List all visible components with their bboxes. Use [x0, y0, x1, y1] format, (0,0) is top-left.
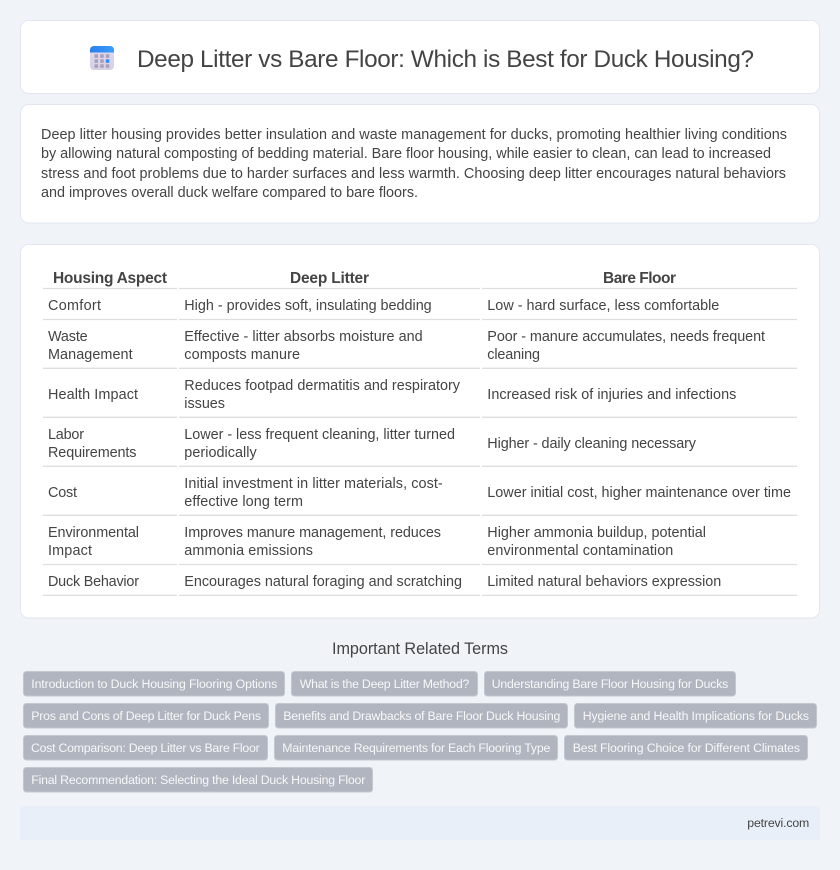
tag: Maintenance Requirements for Each Flooring Type — [282, 741, 550, 755]
tag — [24, 768, 372, 792]
row: health impact: Increased risk of injuries and infections — [487, 387, 736, 403]
row: comfort: Low - hard surface, less comfortable — [487, 298, 719, 314]
row: labor requirements: Higher - daily cleaning necessary — [487, 436, 697, 452]
row: environmental impact: Higher ammonia buildup, potential — [487, 525, 706, 541]
panel: introduction text: and improves overall duck welfare compared to bare floors. — [41, 185, 418, 201]
row: environmental impact: Improves manure management, reduces — [184, 525, 441, 541]
tag — [564, 736, 808, 760]
tag — [24, 672, 284, 696]
related term tags — [24, 672, 816, 792]
tag: Hygiene and Health Implications for Ducks — [583, 709, 809, 723]
row: comfort — [48, 298, 719, 314]
heading: important related terms: Important Related Terms — [332, 640, 508, 658]
table header row: Housing Aspect — [53, 270, 167, 287]
table header row: Deep Litter — [290, 270, 369, 287]
panel: introduction text: Deep litter housing provides better insulation and waste management for ducks, promoting healthier living conditions — [41, 127, 787, 143]
row: environmental impact: environmental contamination — [487, 543, 673, 559]
row: environmental impact: Impact — [48, 543, 92, 559]
tag — [24, 736, 268, 760]
tag: Benefits and Drawbacks of Bare Floor Duck Housing — [283, 709, 560, 723]
row: labor requirements — [48, 427, 697, 461]
tag — [484, 672, 736, 696]
tag — [274, 736, 558, 760]
title: Deep Litter vs Bare Floor: Which is Best for Duck Housing? — [137, 46, 754, 73]
tag: Understanding Bare Floor Housing for Ducks — [492, 677, 728, 691]
footer — [20, 806, 820, 840]
panel: introduction text: by allowing natural composting of bedding material. Bare floor housing, while easier to clean, can lead to increased — [41, 146, 771, 162]
row: health impact — [48, 378, 736, 412]
tag: Cost Comparison: Deep Litter vs Bare Floor — [31, 741, 260, 755]
row: environmental impact: Environmental — [48, 525, 139, 541]
tag: Pros and Cons of Deep Litter for Duck Pens — [31, 709, 261, 723]
row: health impact: issues — [184, 396, 225, 412]
tag: What is the Deep Litter Method? — [300, 677, 469, 691]
row: health impact: Health Impact — [48, 387, 138, 403]
row: waste management: Effective - litter absorbs moisture and — [184, 329, 423, 345]
panel: introduction text — [20, 104, 820, 223]
tag — [574, 704, 816, 728]
tag: Final Recommendation: Selecting the Ideal Duck Housing Floor — [31, 773, 365, 787]
header panel — [20, 20, 820, 94]
row: duck behavior: Limited natural behaviors expression — [487, 574, 721, 590]
tag — [292, 672, 478, 696]
row: duck behavior — [48, 574, 721, 590]
footer: petrevi.com — [747, 816, 809, 830]
table header row — [53, 270, 676, 287]
table header row: Bare Floor — [603, 270, 676, 287]
icon: calendar — [90, 46, 114, 70]
row: labor requirements: Requirements — [48, 445, 136, 461]
row: waste management: Management — [48, 347, 133, 363]
row: cost — [48, 476, 791, 510]
row: duck behavior: Encourages natural foraging and scratching — [184, 574, 462, 590]
row: environmental impact: ammonia emissions — [184, 543, 313, 559]
row: duck behavior: Duck Behavior — [48, 574, 139, 590]
tag: Introduction to Duck Housing Flooring Options — [31, 677, 277, 691]
tag: Best Flooring Choice for Different Climates — [573, 741, 800, 755]
panel: comparison table — [20, 244, 820, 618]
row: waste management: Waste — [48, 329, 88, 345]
row: environmental impact — [48, 525, 706, 559]
row: comfort: High - provides soft, insulating bedding — [184, 298, 432, 314]
row: cost: effective long term — [184, 494, 303, 510]
row: cost: Cost — [48, 485, 77, 501]
row: waste management: Poor - manure accumulates, needs frequent — [487, 329, 765, 345]
row: labor requirements: Lower - less frequent cleaning, litter turned — [184, 427, 455, 443]
row: labor requirements: Labor — [48, 427, 84, 443]
row: waste management — [48, 329, 765, 363]
row: comfort: Comfort — [48, 298, 101, 314]
row: waste management: cleaning — [487, 347, 540, 363]
panel: introduction text: stress and foot problems due to harder surfaces and less warmth. Choosing deep litter encourages natural behaviors — [41, 166, 786, 182]
row: cost: Lower initial cost, higher maintenance over time — [487, 485, 791, 501]
row: labor requirements: periodically — [184, 445, 257, 461]
row: waste management: composts manure — [184, 347, 300, 363]
tag — [276, 704, 568, 728]
row: cost: Initial investment in litter materials, cost- — [184, 476, 443, 492]
row: health impact: Reduces footpad dermatitis and respiratory — [184, 378, 461, 394]
tag — [24, 704, 268, 728]
